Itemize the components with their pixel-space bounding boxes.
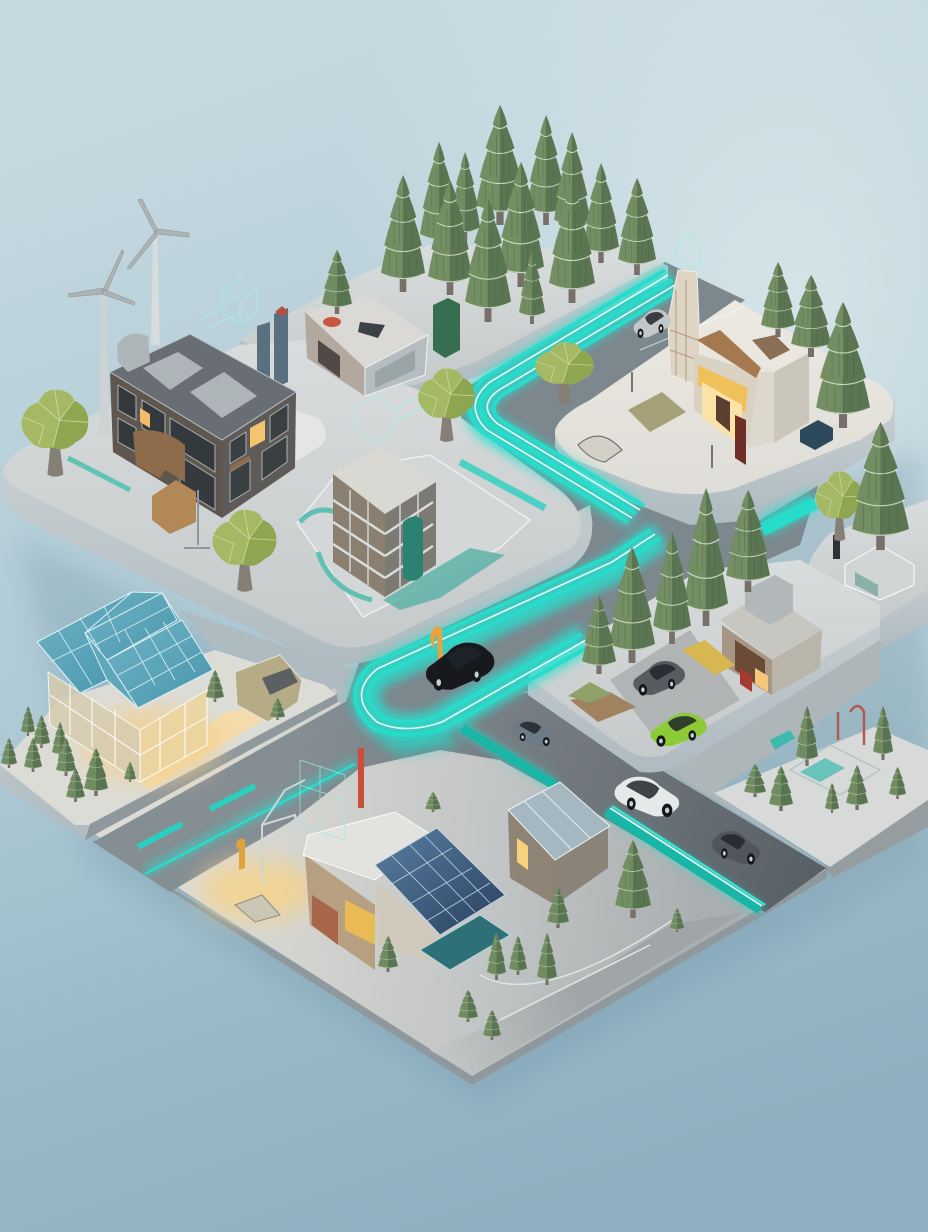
upper road surface	[345, 262, 820, 745]
platform: upper-left campus	[3, 340, 592, 664]
stairs	[235, 895, 280, 922]
soil bed	[570, 692, 636, 722]
road dashes	[138, 786, 255, 847]
teal strip on path	[68, 458, 130, 490]
icon: wind turbines	[68, 199, 189, 435]
car: dark parked	[633, 661, 685, 696]
bench	[578, 436, 622, 462]
gable house	[508, 810, 555, 905]
side shed	[235, 655, 302, 722]
platform: right middle	[527, 560, 880, 870]
lit doorway	[517, 838, 528, 870]
front turbine	[68, 250, 135, 435]
pine trees: right	[761, 262, 909, 550]
glowing road lines	[138, 270, 815, 910]
car: dark grey	[712, 831, 760, 865]
main box right face	[774, 353, 809, 443]
ground plate side	[85, 836, 827, 1085]
yellow canopy	[682, 640, 735, 675]
dark doorway	[716, 395, 730, 432]
pine forest: top	[322, 105, 656, 324]
windows right	[230, 404, 288, 502]
solar roof mid	[85, 593, 177, 660]
warm window	[698, 365, 748, 412]
platform: left solar	[0, 650, 338, 840]
wood roof	[697, 330, 761, 378]
building: small top workshop	[305, 295, 460, 396]
kiosk	[152, 480, 196, 534]
brown panels	[230, 455, 250, 472]
roof hatch	[752, 335, 790, 360]
chimneys	[257, 308, 288, 388]
signage post	[236, 838, 245, 870]
vehicles	[426, 309, 760, 865]
building: far right station	[833, 535, 914, 600]
windows left	[118, 385, 215, 510]
solar roof left	[37, 592, 132, 693]
walls	[48, 672, 140, 782]
bright lanes	[145, 270, 815, 910]
car: grey on top road	[634, 309, 671, 338]
round trees	[22, 342, 863, 592]
glass tower	[668, 270, 700, 385]
pale link under upper platform	[180, 610, 365, 705]
ground front band	[430, 912, 745, 1075]
left body	[305, 855, 375, 970]
red-orange tower sign	[358, 748, 364, 808]
building: right cream hall	[578, 270, 833, 465]
car: black suv on curve	[426, 643, 494, 691]
platform: far right	[808, 500, 928, 650]
warm ground light	[200, 860, 316, 920]
warm glow	[80, 709, 220, 781]
main box roof	[712, 317, 809, 372]
chimney cap	[275, 306, 289, 316]
small pines: plaza	[744, 706, 906, 813]
courtyard road stripe	[460, 462, 545, 508]
small pines: left	[1, 670, 285, 802]
pine trees: middle	[582, 488, 770, 674]
blue box	[800, 420, 833, 450]
patio	[628, 392, 686, 432]
warm lit window	[140, 408, 150, 428]
rear turbine	[127, 199, 189, 345]
solar roof backing	[37, 592, 213, 708]
warm floor	[140, 700, 300, 790]
brown arch	[133, 430, 185, 482]
left face	[110, 372, 222, 518]
street signs and posts	[430, 626, 864, 745]
front bay face	[694, 353, 759, 445]
right face	[222, 392, 296, 518]
solar roof	[375, 828, 505, 935]
lawn curve	[480, 915, 680, 1020]
rounded patio beside office	[290, 408, 326, 462]
car: green	[650, 713, 707, 747]
car: grey on lower road	[512, 719, 554, 746]
ground and road network	[85, 262, 827, 1085]
main box front	[748, 372, 774, 448]
building: central tower	[333, 447, 436, 597]
grass bed	[568, 682, 612, 703]
roof units	[117, 333, 257, 418]
parking	[610, 630, 740, 745]
teal pool	[383, 548, 505, 610]
hologram over bottom area	[300, 760, 345, 840]
ground plate surface	[85, 680, 826, 1076]
teal arc	[300, 510, 372, 600]
lamp post	[184, 490, 210, 548]
building: bottom solar house	[235, 748, 610, 970]
platform: top forest	[240, 245, 668, 400]
lamp posts	[632, 372, 712, 468]
building: right market	[682, 575, 822, 695]
building: grey solar office	[110, 306, 296, 548]
red door	[735, 415, 746, 465]
lower ledge	[527, 625, 880, 870]
front wall	[375, 880, 440, 965]
metal gantry	[262, 780, 305, 885]
teal pad	[420, 915, 510, 970]
white highlights	[362, 275, 762, 906]
teal flare at junction	[375, 730, 464, 757]
platform: lower right plaza	[714, 727, 928, 878]
platform shadows	[20, 450, 928, 1100]
platform: right building	[555, 300, 895, 525]
lower road surface	[93, 692, 826, 912]
green cabinet	[433, 298, 460, 358]
roof	[110, 334, 296, 440]
hologram wireframes	[200, 235, 700, 442]
panel grid	[50, 606, 202, 692]
building: left solar greenhouse	[37, 592, 302, 782]
white roof	[303, 812, 432, 880]
green tank	[403, 516, 423, 581]
solar roof right	[107, 620, 213, 708]
car: white	[615, 777, 679, 817]
small pines: bottom	[378, 792, 684, 1040]
glow halo	[145, 278, 815, 910]
inner courtyard	[297, 455, 530, 617]
